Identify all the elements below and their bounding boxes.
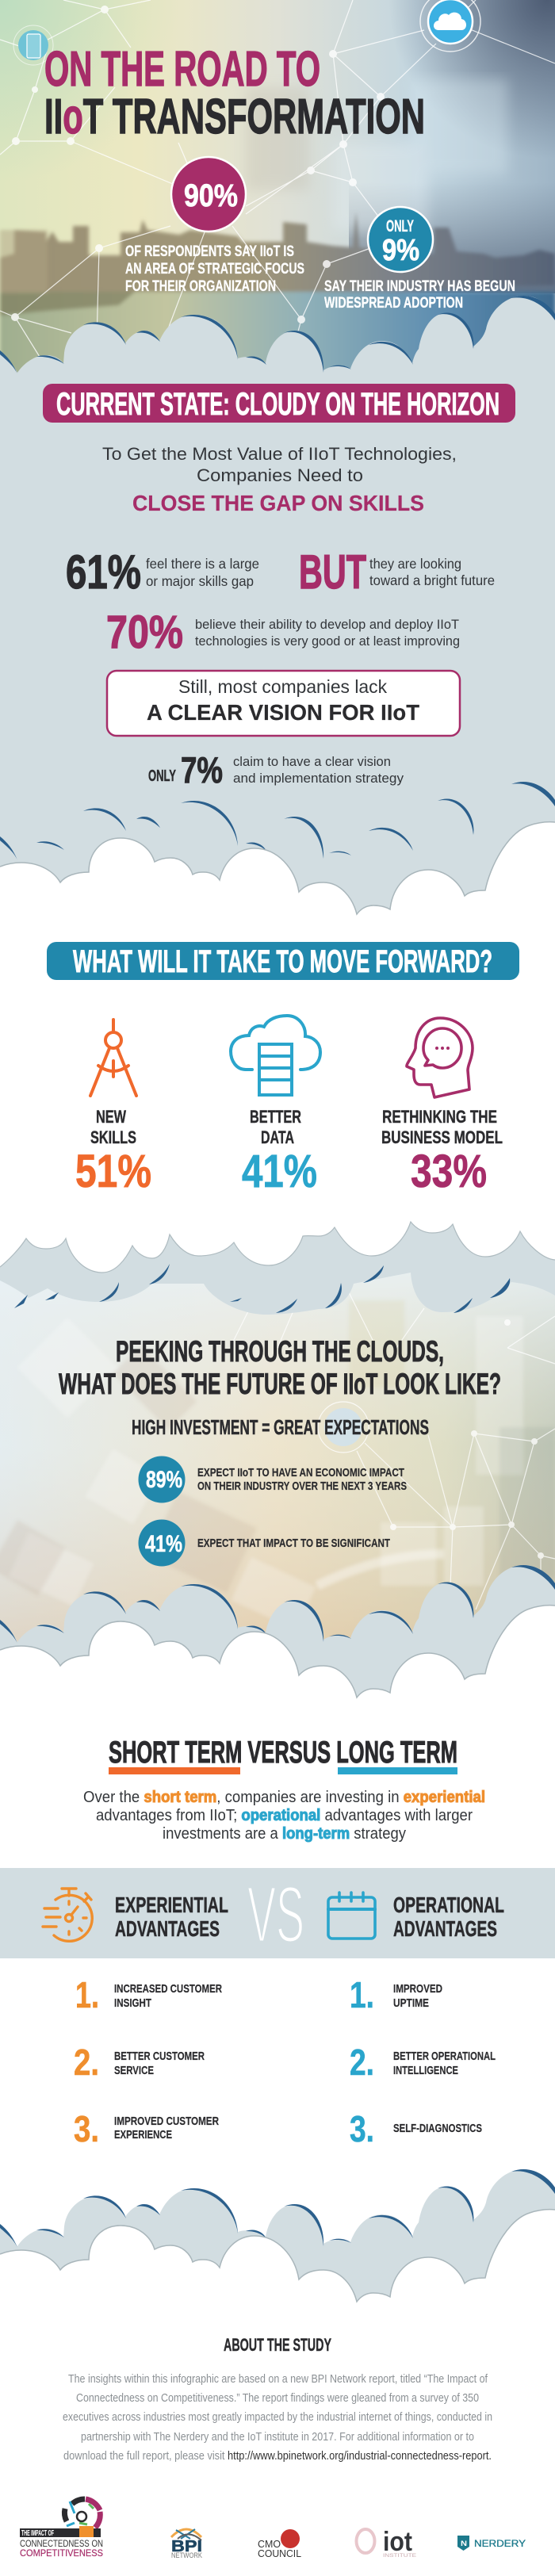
text: experiential advantages: ADVANTAGES [115, 1916, 220, 1941]
stat: rethinking the business model: 33% [411, 1146, 487, 1197]
text: term explanation: investments are a long-term strategy [163, 1825, 406, 1843]
item: better customer service [74, 2042, 205, 2083]
logo: CMO council [258, 2529, 301, 2559]
text: experiential advantages [115, 1893, 228, 1941]
stat: 89%: ON THEIR INDUSTRY OVER THE NEXT 3 YEARS [197, 1479, 407, 1493]
logo: iot institute [357, 2527, 416, 2559]
text: term explanation: Over the short term, companies are investing in experiential [83, 1789, 485, 1806]
stat: but bright future: toward a bright future [369, 572, 495, 588]
logo: nerdery: N [461, 2540, 467, 2547]
item: improved customer experience: 3. [74, 2108, 99, 2149]
panel: partner logos [20, 2499, 526, 2559]
heading: about the study: ABOUT THE STUDY [224, 2335, 331, 2355]
item: better customer service: SERVICE [114, 2064, 154, 2077]
stat: 61% skills gap [66, 545, 259, 599]
text: 9% description [324, 278, 515, 312]
panel: current state [43, 384, 515, 790]
logo: connectedness on competitiveness: CONNECTEDNESS ON [20, 2538, 103, 2549]
item: self-diagnostics [350, 2108, 482, 2149]
stat: 89%: EXPECT IIoT TO HAVE AN ECONOMIC IMPACT [197, 1466, 404, 1479]
icon: head with speech bubble [407, 1018, 473, 1097]
panel: about the study [63, 2335, 492, 2463]
stat: only 9% circle: ONLY [386, 217, 414, 235]
text: skills intro: Companies Need to [197, 465, 363, 485]
text: study description [63, 2372, 492, 2463]
text: operational advantages: OPERATIONAL [393, 1893, 504, 1917]
item: increased customer insight [75, 1974, 222, 2015]
item: improved uptime: IMPROVED [393, 1982, 442, 1996]
cloud: current state lower edge [0, 782, 555, 1120]
stat: 89% [138, 1456, 407, 1503]
logo: iot institute: INSTITUTE [383, 2554, 416, 2559]
logo: connectedness on competitiveness: THE IMPACT OF [21, 2529, 54, 2538]
text: VS: VS [247, 1870, 304, 1959]
peeking background image [0, 1273, 555, 1657]
text: skills intro: To Get the Most Value of IIoT Technologies, [102, 444, 457, 464]
skyline [0, 212, 555, 381]
stat: 61% skills gap: 61% [66, 545, 141, 599]
text: operational advantages [393, 1893, 504, 1941]
panel: short term versus long term [0, 1736, 555, 2149]
cloud: footer edge [0, 2169, 555, 2508]
heading: future of IIoT [59, 1335, 501, 1400]
text: 90% description: FOR THEIR ORGANIZATION [125, 278, 276, 295]
stat: new skills: 51% [75, 1146, 151, 1197]
stat: but bright future: BUT [299, 545, 366, 599]
item: better customer service: BETTER CUSTOMER [114, 2050, 205, 2063]
text: term explanation [83, 1789, 485, 1843]
stat: 70% ability: technologies is very good or at least improving [195, 633, 460, 649]
text: skills intro [102, 444, 457, 515]
stat: better data: BETTER [250, 1107, 301, 1127]
cloud: hero bottom edge [0, 296, 555, 476]
stat: 70% ability [106, 607, 460, 658]
logo: BPI network: BPI [171, 2538, 202, 2555]
text: skills intro: CLOSE THE GAP ON SKILLS [132, 491, 424, 515]
logo: CMO council: CMO [258, 2538, 281, 2550]
cloud band: peeking top [0, 1222, 555, 1315]
logo: CMO council: COUNCIL [258, 2547, 301, 2559]
network lines [230, 1292, 555, 1610]
icon: cloud data [231, 1016, 320, 1095]
logo: nerdery [457, 2536, 526, 2551]
item: increased customer insight: INCREASED CUSTOMER [114, 1982, 222, 1996]
title: ON THE ROAD TO [44, 42, 320, 97]
panel: peeking through the clouds [0, 1222, 555, 1657]
network lines [0, 0, 555, 357]
stat: but bright future: they are looking [369, 556, 461, 572]
cloud: peeking lower edge [0, 1565, 555, 1904]
text: 9% description: WIDESPREAD ADOPTION [324, 295, 463, 312]
stat: only 7%: ONLY [148, 767, 176, 785]
item: self-diagnostics: SELF-DIAGNOSTICS [393, 2122, 482, 2135]
item: self-diagnostics: 3. [350, 2108, 374, 2149]
text: study description: partnership with The Nerdery and the IoT institute in 2017. For additional information or to [81, 2430, 474, 2444]
icon: compass [90, 1020, 136, 1096]
text: term explanation: advantages from IIoT; operational advantages with larger [96, 1807, 473, 1824]
text: 90% description: AN AREA OF STRATEGIC FOCUS [125, 261, 304, 278]
logo: nerdery: NERDERY [474, 2538, 526, 2549]
panel: versus band [0, 1868, 555, 1959]
item: improved uptime [350, 1974, 442, 2015]
text: operational advantages: ADVANTAGES [393, 1916, 497, 1941]
stat: only 7% [148, 749, 404, 790]
stat: rethinking the business model: BUSINESS MODEL [381, 1127, 503, 1147]
hero background photo [0, 0, 555, 381]
item: improved uptime: UPTIME [393, 1996, 429, 2010]
logo: iot institute: iot [383, 2527, 412, 2557]
stat: 41%: 41% [145, 1531, 182, 1557]
item: improved uptime: 1. [350, 1974, 374, 2015]
logo: connectedness on competitiveness [20, 2499, 103, 2559]
item: improved customer experience [74, 2108, 219, 2149]
callout: clear vision box: A CLEAR VISION FOR IIoT [147, 700, 419, 725]
stat: 70% ability: believe their ability to develop and deploy IIoT [195, 617, 459, 632]
stat: rethinking the business model: RETHINKING THE [382, 1107, 497, 1127]
list: operational advantages [350, 1974, 496, 2149]
icon: phone [13, 25, 53, 65]
title [44, 42, 425, 144]
panel: hero header [0, 0, 555, 381]
stat: 41% [138, 1519, 390, 1567]
stat: 70% ability: 70% [106, 607, 183, 658]
list: experiential advantages [74, 1974, 222, 2149]
callout: clear vision box [107, 671, 460, 736]
stat: 90% circle [171, 157, 246, 232]
stat: only 7%: claim to have a clear vision [233, 754, 391, 769]
logo: BPI network: NETWORK [171, 2551, 202, 2559]
item: better customer service: 2. [74, 2042, 99, 2083]
stat: better data: 41% [242, 1146, 317, 1197]
stat: 89%: 89% [146, 1467, 182, 1493]
text: study description: download the full report, please visit http://www.bpinetwork.org/industrial-connectedness-report. [63, 2449, 492, 2463]
item: improved customer experience: EXPERIENCE [114, 2128, 172, 2142]
logo: connectedness on competitiveness: COMPETITIVENESS [20, 2547, 103, 2559]
icon: calendar [328, 1893, 375, 1939]
stat: new skills: SKILLS [90, 1127, 136, 1147]
logo: BPI network [171, 2529, 202, 2559]
stat: only 9% circle [368, 207, 433, 272]
stat: 90% circle: 90% [184, 178, 238, 213]
item: better operational intelligence: BETTER OPERATIONAL [393, 2050, 496, 2063]
text: 90% description: OF RESPONDENTS SAY IIoT IS [125, 243, 294, 260]
stat: only 9% circle: 9% [382, 234, 419, 267]
callout: clear vision box: Still, most companies lack [178, 676, 387, 697]
stat: only 7%: 7% [181, 749, 223, 790]
item: increased customer insight: INSIGHT [114, 1996, 151, 2010]
stat: new skills: NEW [96, 1107, 126, 1127]
icon: stopwatch [43, 1889, 92, 1941]
panel: current state background [0, 373, 555, 959]
item: better operational intelligence: INTELLIGENCE [393, 2064, 458, 2077]
stat: but bright future [299, 545, 495, 599]
stat: new skills [75, 1107, 151, 1197]
text: study description: Connectedness on Competitiveness.” The report findings were gleaned from a survey of 350 [76, 2391, 479, 2405]
stat: better data: DATA [261, 1127, 294, 1147]
stat: 41%: EXPECT THAT IMPACT TO BE SIGNIFICANT [197, 1537, 390, 1550]
panel: moving forward [47, 942, 519, 1197]
item: improved customer experience: IMPROVED CUSTOMER [114, 2115, 219, 2128]
text: experiential advantages: EXPERIENTIAL [115, 1893, 228, 1917]
stat: 61% skills gap: feel there is a large [146, 556, 259, 572]
stat: better data [242, 1107, 317, 1197]
text: 90% description [125, 243, 304, 295]
item: better operational intelligence: 2. [350, 2042, 374, 2083]
stat: 61% skills gap: or major skills gap [146, 573, 254, 589]
icon: faint network node [318, 1402, 369, 1453]
item: increased customer insight: 1. [75, 1974, 99, 2015]
stat: only 7%: and implementation strategy [233, 771, 404, 786]
stat: rethinking the business model [381, 1107, 503, 1197]
icon: cloud node [420, 0, 480, 52]
item: better operational intelligence [350, 2042, 496, 2083]
